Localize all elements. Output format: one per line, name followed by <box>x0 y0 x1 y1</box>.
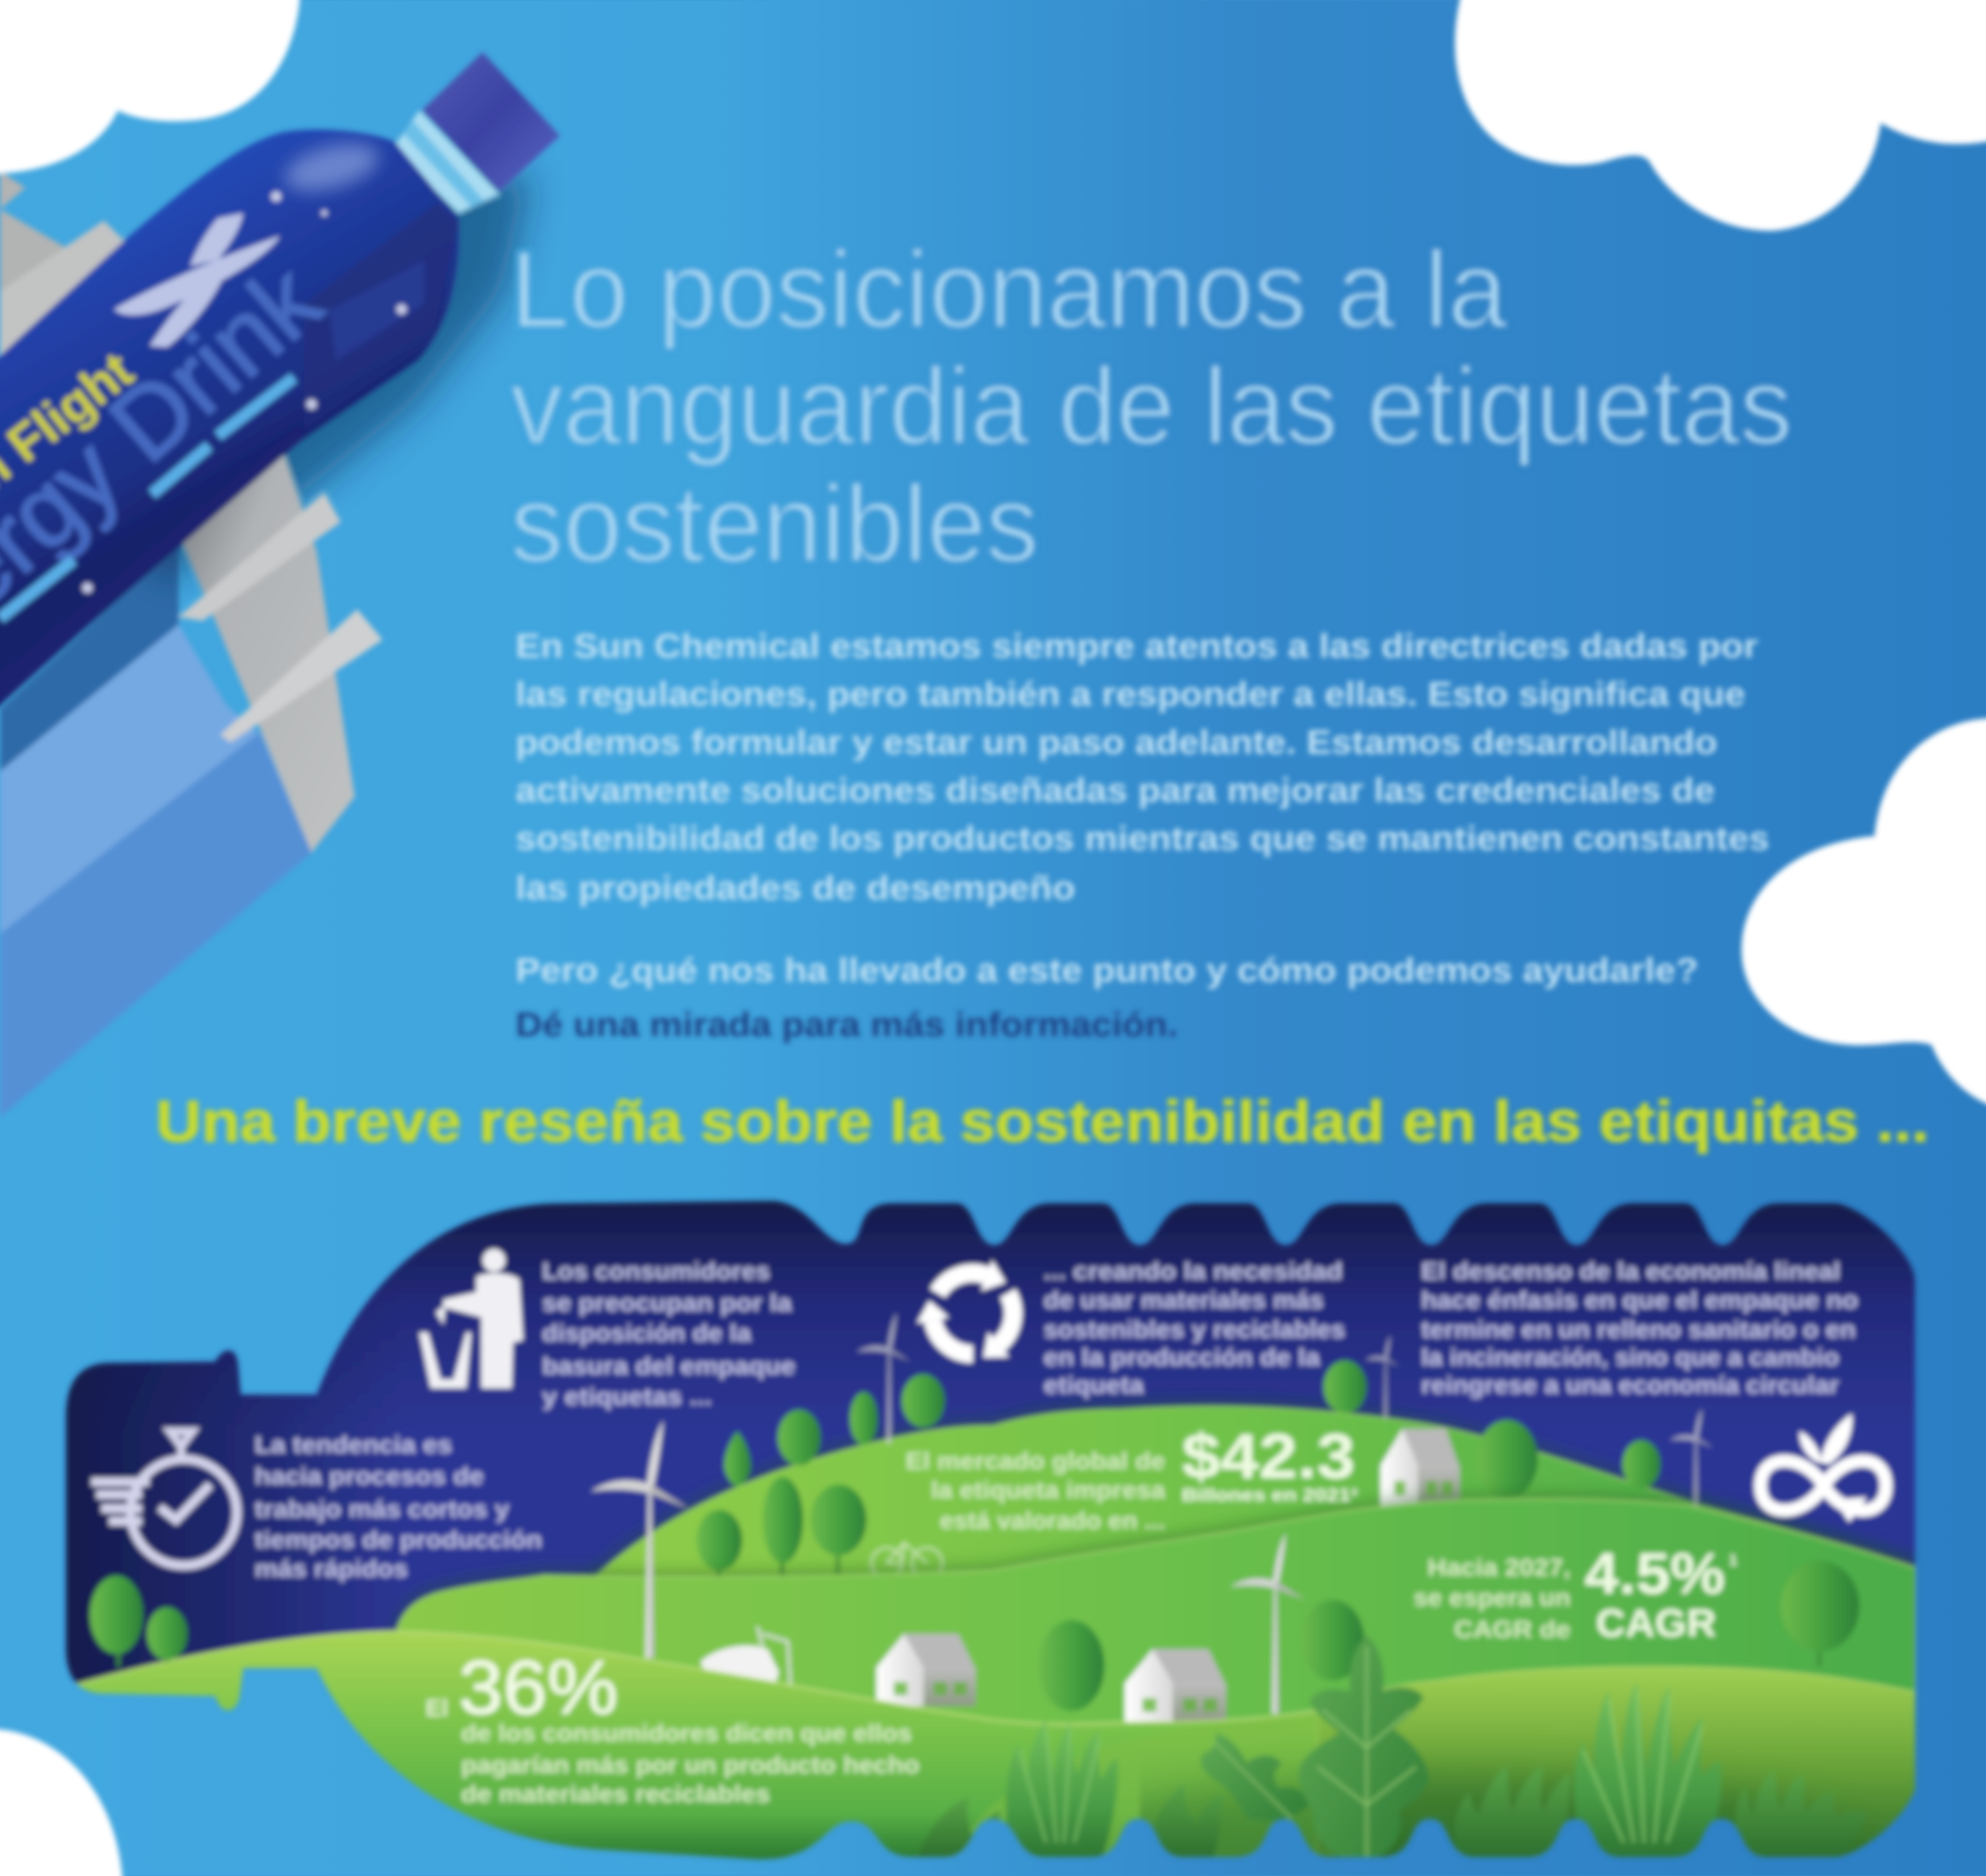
text: sustainable materials: en la producción de la <box>1043 1344 1321 1371</box>
text: trend: más rápidos <box>254 1557 408 1583</box>
text: consumers: basura del empaque <box>542 1354 796 1380</box>
blue trail ribbons <box>0 345 312 1117</box>
text: sustainable materials: sostenibles y reciclables <box>1043 1317 1345 1343</box>
panel: bottle-shaped infographic <box>51 1190 1938 1876</box>
text: linear economy <box>1421 1259 1858 1398</box>
stat: $42.3: Billones en 2021² <box>1182 1485 1358 1505</box>
stat: market value label: está valorado en ... <box>940 1508 1165 1534</box>
text: consumers would pay more: de materiales reciclables <box>461 1781 770 1808</box>
text: consumers: y etiquetas ... <box>542 1384 712 1410</box>
windmill centre <box>1230 1533 1305 1714</box>
intro paragraph: sostenibilidad de los productos mientras que se mantienen constantes <box>516 820 1769 858</box>
icon: stopwatch <box>91 1431 237 1565</box>
grass clump C <box>1735 1770 1867 1857</box>
title: sostenibles <box>510 463 1039 585</box>
text: linear economy: El descenso de la economía lineal <box>1421 1259 1841 1285</box>
stat: $42.3: $42.3 <box>1182 1421 1355 1491</box>
middle hill <box>395 1499 1915 1798</box>
windmill top right <box>1670 1409 1713 1514</box>
text: sustainable materials: de usar materiales más <box>1043 1288 1323 1314</box>
house left <box>877 1634 976 1706</box>
cloud: top left <box>0 0 300 174</box>
windmill top centre <box>1365 1335 1399 1418</box>
bottle label and decoration <box>0 132 462 626</box>
text: sustainable materials: ... creando la necesidad <box>1043 1259 1342 1285</box>
stat: CAGR label: se espera un <box>1414 1585 1570 1611</box>
question line: Pero ¿qué nos ha llevado a este punto y cómo podemos ayudarle? <box>516 951 1698 989</box>
stat: market value label <box>906 1449 1166 1534</box>
foreground shading <box>1077 1773 1837 1876</box>
back hill <box>585 1393 1915 1580</box>
windmill far left <box>857 1313 911 1444</box>
stat: CAGR label: Hacia 2027, <box>1427 1555 1570 1581</box>
title: Lo posicionamos a la <box>510 230 1508 351</box>
section heading: Una breve reseña sobre la sostenibilidad en las etiquitas ... <box>156 1089 1929 1154</box>
call to action line: Dé una mirada para más información. <box>516 1006 1178 1044</box>
stat: CAGR label <box>1414 1555 1570 1643</box>
trees on back hill <box>697 1360 1660 1578</box>
text: consumers <box>542 1259 796 1410</box>
text: linear economy: la incineración, sino que a cambio <box>1421 1344 1839 1371</box>
text: linear economy: reingrese a una economía circular <box>1421 1372 1839 1398</box>
grass clump B <box>1574 1681 1721 1858</box>
grass clump E <box>918 1783 1222 1857</box>
title: vanguardia de las etiquetas <box>510 346 1792 467</box>
icon: circular economy infinity with leaves <box>1760 1414 1886 1522</box>
text: sustainable materials: etiqueta <box>1043 1372 1144 1398</box>
icon: car with charger <box>700 1627 790 1685</box>
text: consumers would pay more <box>461 1721 919 1808</box>
intro paragraph: activamente soluciones diseñadas para mejorar las credenciales de <box>516 772 1715 810</box>
lower wing with fins <box>179 454 382 853</box>
text: consumers: Los consumidores <box>542 1259 770 1285</box>
trees bottom left <box>90 1576 188 1667</box>
text: consumers: se preocupan por la <box>542 1290 792 1317</box>
title <box>510 230 1792 585</box>
front hill <box>51 1631 1342 1874</box>
stat: 4.5% CAGR <box>1585 1541 1737 1645</box>
intro paragraph: podemos formular y estar un paso adelante. Estamos desarrollando <box>516 724 1717 762</box>
oak leaf large <box>1299 1635 1429 1858</box>
text: consumers: disposición de la <box>542 1321 752 1347</box>
intro paragraph <box>516 627 1769 907</box>
intro paragraph: las propiedades de desempeño <box>516 869 1075 907</box>
big windmill <box>590 1421 689 1658</box>
label stripes <box>0 377 294 618</box>
stat: 4.5% CAGR: CAGR <box>1596 1601 1717 1645</box>
bottle body <box>0 130 459 717</box>
front right hill <box>1318 1667 1925 1874</box>
icon: bicycles <box>871 1543 943 1578</box>
icon: recycling arrows <box>910 1260 1036 1371</box>
text: linear economy: termine en un relleno sanitario o en <box>1421 1317 1856 1343</box>
text: linear economy: hace énfasis en que el empaque no <box>1421 1288 1858 1314</box>
bottle cap <box>422 52 559 191</box>
stars <box>83 191 407 593</box>
text: trend: La tendencia es <box>254 1432 452 1458</box>
upper wing <box>0 171 126 355</box>
stat: 36%: 36% <box>459 1646 618 1731</box>
text: trend <box>254 1432 542 1583</box>
stat: market value label: la etiqueta impresa <box>931 1478 1166 1504</box>
bottle shadow <box>126 153 532 582</box>
trees on middle hill <box>1039 1561 1860 1711</box>
text: consumers would pay more: de los consumidores dicen que ellos <box>461 1721 912 1747</box>
intro paragraph: En Sun Chemical estamos siempre atentos a las directrices dadas por <box>516 627 1758 665</box>
plane icon on bottle <box>114 213 280 347</box>
intro paragraph: las regulaciones, pero también a responder a ellas. Esto significa que <box>516 675 1745 714</box>
stat: 4.5% CAGR: 4.5% <box>1585 1541 1725 1606</box>
oak leaf small <box>1201 1733 1310 1820</box>
text: trend: trabajo más cortos y <box>254 1497 509 1523</box>
house on back hill <box>1380 1429 1460 1507</box>
house right <box>1125 1649 1226 1723</box>
grass clump D <box>1455 1766 1570 1857</box>
text: trend: hacia procesos de <box>254 1464 484 1490</box>
stat: 36%: El <box>426 1696 448 1722</box>
stat: 4.5% CAGR: 1 <box>1729 1553 1737 1569</box>
cloud: bottom left <box>0 1729 123 1876</box>
text: consumers would pay more: pagarían más por un producto hecho <box>461 1753 919 1779</box>
bottle neck <box>393 110 499 213</box>
illustration: plane-shaped bottle with trail <box>0 52 559 1117</box>
icon: person with trash bin <box>420 1249 523 1388</box>
text: trend: tiempos de producción <box>254 1527 542 1553</box>
cloud: right <box>1741 718 1986 1108</box>
text: sustainable materials <box>1043 1259 1345 1398</box>
stat: market value label: El mercado global de <box>906 1449 1165 1475</box>
cloud: top right <box>1455 0 1986 230</box>
stat: CAGR label: CAGR de <box>1454 1617 1570 1643</box>
grass clump A <box>1006 1720 1117 1858</box>
